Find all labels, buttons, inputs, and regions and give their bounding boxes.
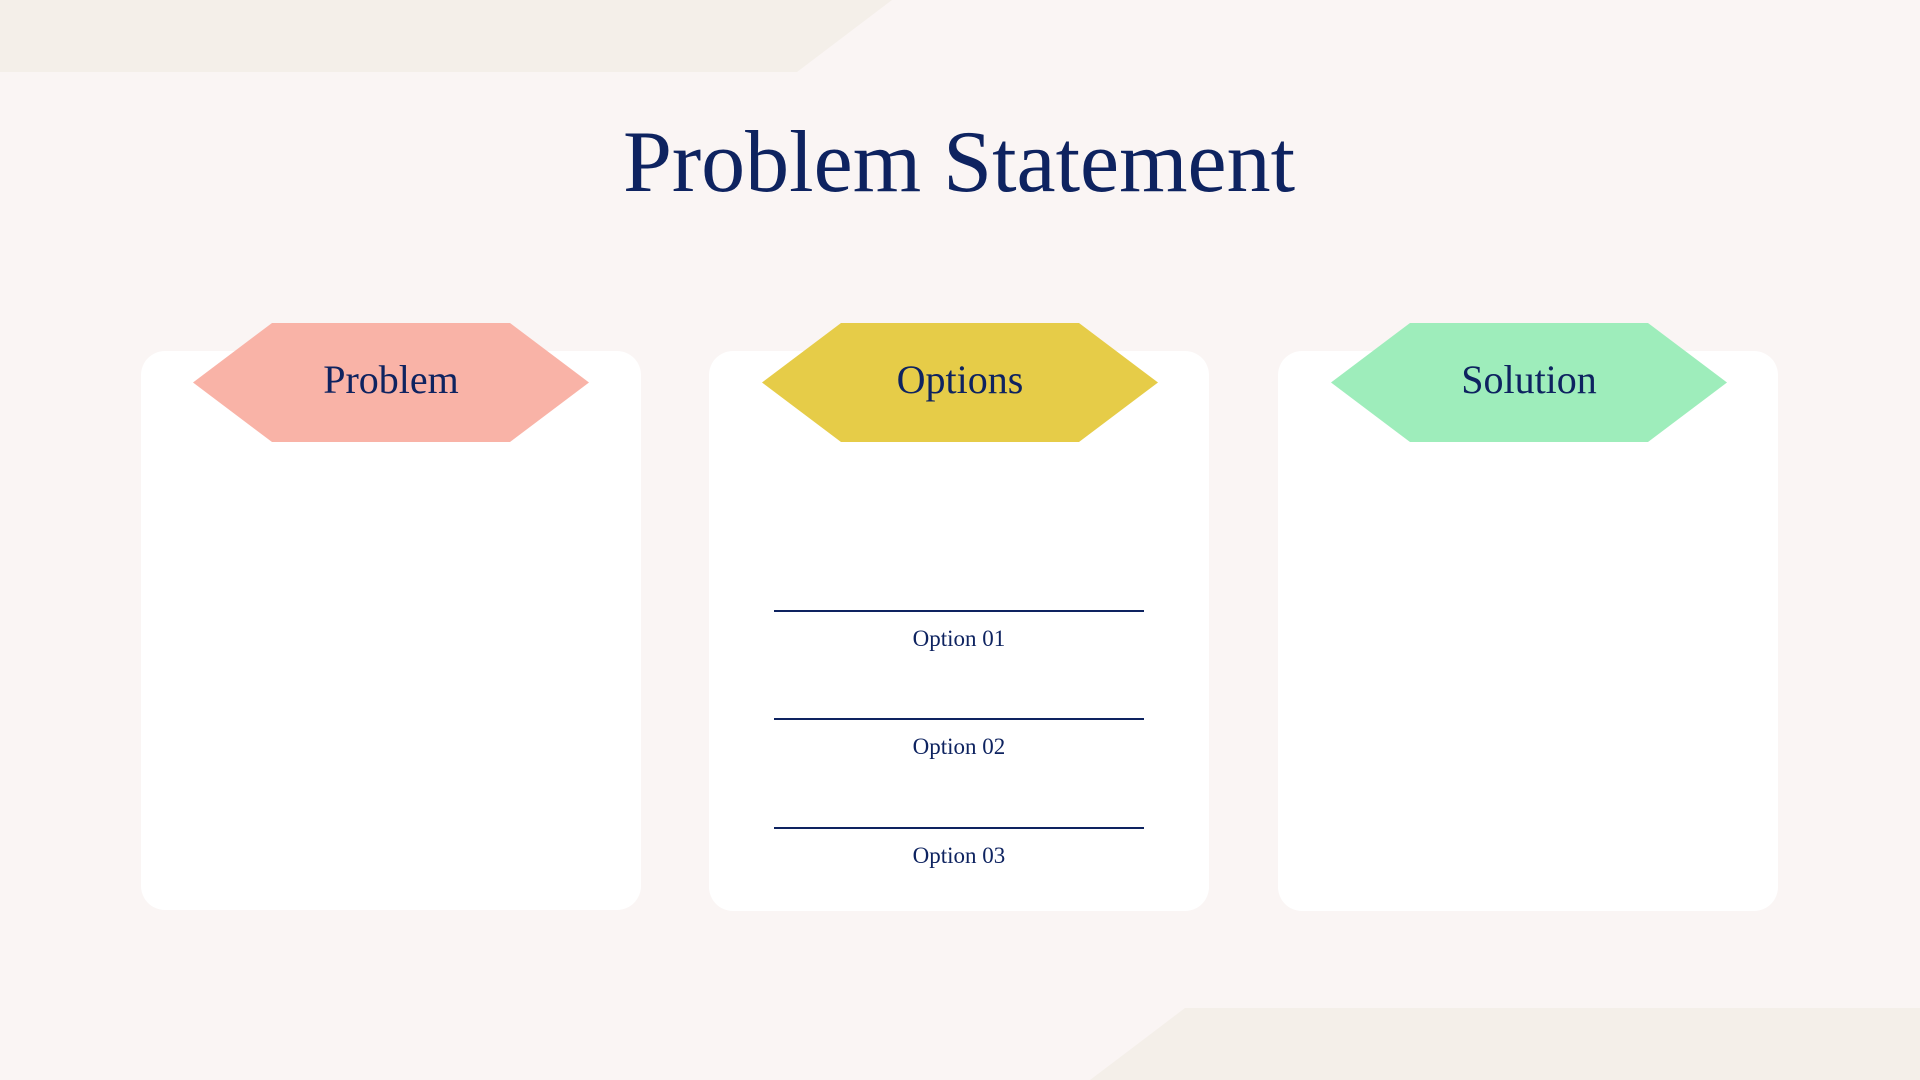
header: problem bbox=[193, 323, 589, 442]
panel: solution bbox=[1278, 351, 1778, 911]
header: solution: Solution bbox=[1461, 357, 1597, 402]
option 01 bbox=[774, 610, 1144, 660]
panel: options bbox=[709, 351, 1209, 911]
panel: problem bbox=[141, 351, 641, 910]
decorative band: bottom-right bbox=[1090, 1008, 1920, 1080]
header: solution bbox=[1331, 323, 1727, 442]
decorative band: top-left bbox=[0, 0, 892, 72]
option 02 bbox=[774, 718, 1144, 768]
title: Problem Statement bbox=[623, 114, 1295, 211]
option 01: Option 01 bbox=[913, 626, 1005, 651]
header: options bbox=[762, 323, 1158, 442]
header: problem: Problem bbox=[323, 357, 459, 402]
option 03 bbox=[774, 827, 1144, 877]
header: options: Options bbox=[897, 357, 1023, 402]
option 02: Option 02 bbox=[913, 734, 1005, 759]
option 03: Option 03 bbox=[913, 843, 1005, 868]
